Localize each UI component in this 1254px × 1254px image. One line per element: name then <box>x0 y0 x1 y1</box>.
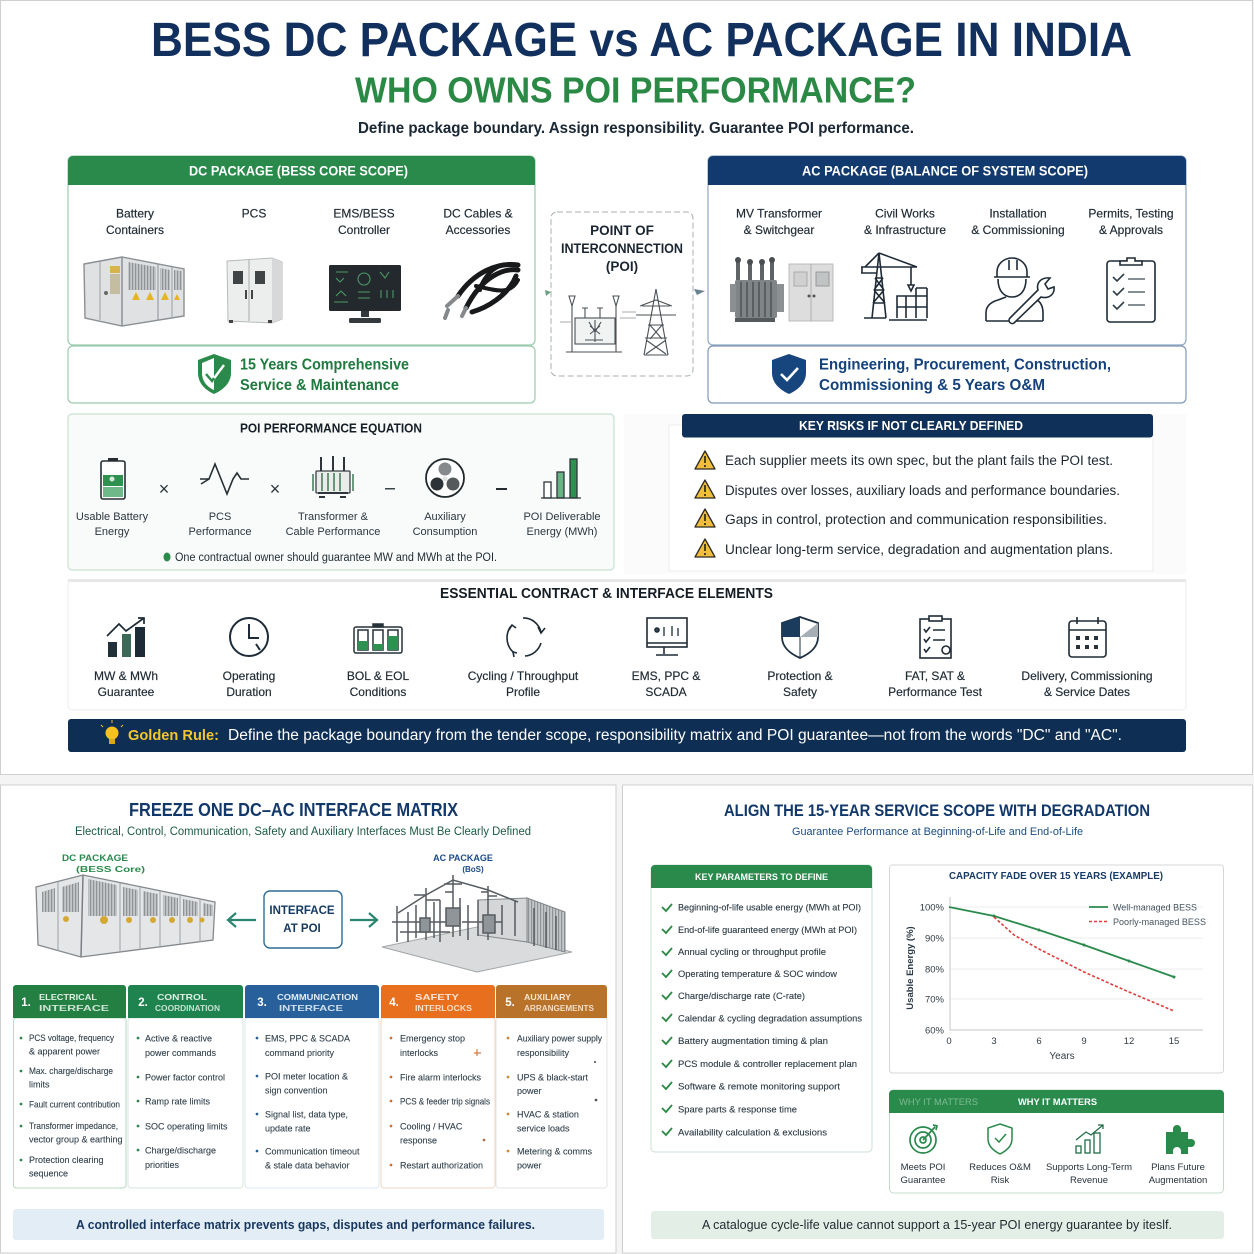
icon: PCS waveform <box>200 464 249 494</box>
labels: contract elements: Protection & <box>767 669 833 683</box>
labels: DC scope items: EMS/BESS <box>333 206 395 220</box>
heading: POI: (POI) <box>606 259 638 274</box>
heading: POI: INTERCONNECTION <box>561 241 683 256</box>
arrow: DC to POI <box>545 290 551 296</box>
labels: why it matters: Risk <box>991 1175 1009 1186</box>
checklist: parameters: Calendar & cycling degradation assumptions <box>678 1014 862 1024</box>
labels: equation terms: Usable Battery <box>76 511 149 523</box>
labels: contract elements: Guarantee <box>98 685 155 699</box>
matrix: interface columns <box>13 985 609 1188</box>
column 5: auxiliary: responsibility <box>517 1048 570 1058</box>
icon: risk shield <box>988 1124 1012 1154</box>
labels: AC scope items: Civil Works <box>875 206 935 220</box>
label: AC package: AC PACKAGE <box>433 853 493 863</box>
column 1: electrical: Protection clearing <box>29 1155 104 1165</box>
column 1: electrical: PCS voltage, frequency <box>29 1033 114 1043</box>
labels: contract elements: Duration <box>226 685 272 699</box>
column 2: control: priorities <box>145 1160 180 1170</box>
icon: safety shield <box>782 617 818 658</box>
labels: equation terms: Energy <box>95 526 130 538</box>
column 3: communication: Communication timeout <box>265 1146 360 1156</box>
column 5: auxiliary: Metering & comms <box>517 1146 593 1156</box>
panel: interface matrix <box>0 785 616 1253</box>
labels: AC scope items: & Approvals <box>1099 223 1163 237</box>
column 2: control: Power factor control <box>145 1072 225 1082</box>
tagline: Define package boundary. Assign responsibility. Guarantee POI performance. <box>358 120 914 137</box>
y axis labels: 90% <box>925 934 945 944</box>
icon: checklist clipboard <box>1107 258 1155 322</box>
panel: POI performance equation <box>68 414 614 570</box>
heading: interface matrix: FREEZE ONE DC–AC INTERFACE MATRIX <box>129 800 458 820</box>
labels: contract elements: Cycling / Throughput <box>468 669 579 683</box>
panel: main comparison <box>0 0 1252 774</box>
column 4: safety: SAFETY <box>415 992 459 1002</box>
illustration: AC substation <box>382 875 572 972</box>
subheading: interface matrix: Electrical, Control, Communication, Safety and Auxiliary Interfaces Must Be Clearly Defined <box>75 826 531 838</box>
column 3: communication: INTERFACE <box>279 1004 344 1013</box>
checklist: parameters: End-of-life guaranteed energy (MWh at POI) <box>678 925 857 936</box>
labels: DC scope items: Containers <box>106 223 164 237</box>
labels: equation terms <box>76 511 601 538</box>
icon: worker with wrench <box>986 258 1054 324</box>
risk 1: Each supplier meets its own spec, but the plant fails the POI test. <box>725 453 1113 468</box>
icon: deliverable bars <box>541 459 581 498</box>
column 1: electrical: & apparent power <box>29 1046 100 1056</box>
column 3: communication: COMMUNICATION <box>277 992 358 1002</box>
labels: AC scope items <box>736 206 1174 237</box>
risk 2: Disputes over losses, auxiliary loads and performance boundaries. <box>725 483 1120 498</box>
column 2: control: Ramp rate limits <box>145 1096 211 1106</box>
x axis labels: 6 <box>1036 1036 1042 1047</box>
arrow: to DC package <box>228 913 256 927</box>
legend <box>1089 902 1206 928</box>
column 2: control: Charge/discharge <box>145 1146 216 1156</box>
labels: equation terms: Transformer & <box>298 511 369 523</box>
icon: battery <box>101 458 125 499</box>
x axis title: Years <box>1049 1051 1075 1062</box>
callout text: AC service: Engineering, Procurement, Construction, <box>819 356 1111 374</box>
note: contractual owner: One contractual owner should guarantee MW and MWh at the POI. <box>175 552 497 564</box>
label: DC package: (BESS Core) <box>76 865 145 874</box>
arrow: to AC package <box>350 913 377 927</box>
column 2: control: Active & reactive <box>145 1034 212 1044</box>
icon: clock <box>230 618 268 656</box>
icon: transformer and tower <box>560 289 676 355</box>
subheading: service scope: Guarantee Performance at Beginning-of-Life and End-of-Life <box>792 826 1083 838</box>
heading: essential elements: ESSENTIAL CONTRACT & INTERFACE ELEMENTS <box>440 586 773 602</box>
legend: Well-managed BESS <box>1113 902 1197 914</box>
icon: transformer <box>313 456 353 497</box>
icon: battery container <box>84 257 184 326</box>
icon: auxiliary fan <box>426 459 464 497</box>
panel: why it matters <box>889 1090 1224 1193</box>
x axis labels: 0 <box>946 1036 952 1047</box>
heading: POI: POINT OF <box>590 223 654 238</box>
operator: multiply: × <box>159 479 169 499</box>
labels: contract elements: Performance Test <box>888 685 983 699</box>
y axis labels: 70% <box>925 994 945 1006</box>
banner: controlled interface matrix <box>13 1209 604 1240</box>
callout text: AC service <box>819 356 1111 394</box>
icon: revenue chart <box>1076 1125 1103 1153</box>
banner: golden rule: Golden Rule: <box>128 727 219 744</box>
column 5: auxiliary: Auxiliary power supply <box>517 1034 602 1044</box>
column 4: safety: Fire alarm interlocks <box>400 1072 482 1082</box>
labels: AC scope items: MV Transformer <box>736 206 822 220</box>
panel: AC service callout <box>708 346 1186 403</box>
labels: DC scope items: Battery <box>116 206 154 220</box>
column 1: electrical: Transformer impedance, <box>29 1121 118 1131</box>
label: DC package <box>62 853 145 874</box>
icon: MV transformer and switchgear <box>730 257 833 322</box>
x axis labels: 3 <box>991 1036 997 1047</box>
column 4: safety: PCS & feeder trip signals <box>400 1096 490 1106</box>
y axis labels <box>920 902 945 1036</box>
column 4: safety: 4. <box>389 997 399 1009</box>
checklist: parameters: Annual cycling or throughput profile <box>678 947 826 958</box>
callout text: DC service <box>240 356 409 394</box>
risk 3: Gaps in control, protection and communication responsibilities. <box>725 512 1107 527</box>
column 3: communication <box>245 985 379 1188</box>
icon: SCADA monitor <box>647 618 687 655</box>
labels: why it matters: Reduces O&M <box>969 1162 1031 1173</box>
banner: golden rule: Define the package boundary from the tender scope, responsibility matrix and POI guarantee—not from the words "DC" and "AC". <box>228 727 1122 744</box>
labels: contract elements: Profile <box>506 685 540 699</box>
labels: DC scope items: Accessories <box>446 223 510 237</box>
labels: contract elements <box>94 669 1153 699</box>
column 1: electrical: ELECTRICAL <box>39 992 97 1002</box>
labels: why it matters: Plans Future <box>1151 1162 1205 1173</box>
callout: interface at POI: INTERFACE <box>269 905 335 917</box>
column 4: safety: INTERLOCKS <box>415 1004 473 1013</box>
labels: equation terms: PCS <box>209 511 231 523</box>
column 1: electrical: vector group & earthing <box>29 1134 123 1144</box>
column 2: control: COORDINATION <box>155 1004 220 1013</box>
icon: green shield <box>198 354 231 394</box>
label: DC package: DC PACKAGE <box>62 853 128 863</box>
line: well-managed BESS <box>949 907 1176 978</box>
checklist: parameters <box>662 902 862 1138</box>
column 4: safety: interlocks <box>400 1048 439 1058</box>
column 5: auxiliary: ARRANGEMENTS <box>524 1004 595 1013</box>
labels: contract elements: Conditions <box>350 685 406 699</box>
labels: DC scope items: Controller <box>338 223 390 237</box>
y axis labels: 100% <box>920 902 945 914</box>
icon: light bulb <box>101 720 123 744</box>
labels: why it matters <box>901 1162 1207 1186</box>
checklist: parameters: Battery augmentation timing & plan <box>678 1036 828 1047</box>
panel: key parameters <box>651 865 872 1152</box>
icon: navy shield <box>772 354 806 394</box>
labels: contract elements: FAT, SAT & <box>905 669 965 683</box>
column 5: auxiliary: service loads <box>517 1124 570 1134</box>
labels: DC scope items: PCS <box>242 206 266 220</box>
panel: service scope <box>622 785 1252 1253</box>
banner: catalogue cycle-life: A catalogue cycle-life value cannot support a 15-year POI energy guarantee by iteslf. <box>702 1218 1172 1232</box>
checklist: parameters: Spare parts & response time <box>678 1104 797 1116</box>
column 2: control: SOC operating limits <box>145 1122 228 1132</box>
heading: AC package: AC PACKAGE (BALANCE OF SYSTEM SCOPE) <box>802 164 1088 178</box>
icon: PCS cabinet <box>227 258 282 323</box>
icon: MW guarantee chart <box>107 618 145 657</box>
callout text: DC service: 15 Years Comprehensive <box>240 356 409 374</box>
column 1: electrical: sequence <box>29 1168 68 1178</box>
checklist: parameters: Beginning-of-life usable energy (MWh at POI) <box>678 902 861 914</box>
column 1: electrical: limits <box>29 1080 50 1090</box>
panel: AC package <box>708 156 1186 403</box>
illustration: BESS container <box>36 875 215 957</box>
labels: equation terms: POI Deliverable <box>523 511 601 523</box>
operator: minus <box>385 488 395 490</box>
labels: equation terms: Cable Performance <box>286 526 380 538</box>
y axis labels: 80% <box>925 964 945 976</box>
icon: calendar <box>1069 617 1106 657</box>
labels: contract elements: SCADA <box>645 685 687 699</box>
labels: DC scope items: DC Cables & <box>443 206 513 220</box>
labels: why it matters: Augmentation <box>1149 1175 1207 1186</box>
panel: DC service callout <box>68 346 535 403</box>
column 3: communication: update rate <box>265 1124 311 1134</box>
icon: BOL EOL batteries <box>354 624 402 653</box>
column 3: communication: EMS, PPC & SCADA <box>265 1034 350 1044</box>
chart: capacity fade <box>890 865 1224 1073</box>
column 3: communication: & stale data behavior <box>265 1160 350 1170</box>
column 1: electrical: Fault current contribution <box>29 1100 120 1110</box>
icon: DC cables <box>445 264 518 318</box>
checklist: parameters: Charge/discharge rate (C-rate) <box>678 991 805 1002</box>
icon: puzzle piece <box>1166 1125 1195 1154</box>
panel: DC package <box>68 156 535 403</box>
icon: crane and civil works <box>861 253 927 320</box>
label: AC package <box>433 853 493 874</box>
labels: contract elements: MW & MWh <box>94 669 158 683</box>
operator: multiply: × <box>270 479 280 499</box>
column 3: communication: command priority <box>265 1048 335 1058</box>
column 5: auxiliary: UPS & black-start <box>517 1072 589 1082</box>
column 4: safety: Restart authorization <box>400 1160 483 1170</box>
labels: AC scope items: & Infrastructure <box>864 223 946 237</box>
operator: minus <box>496 488 507 490</box>
column 3: communication: POI meter location & <box>265 1072 348 1082</box>
x axis labels <box>946 1036 1179 1047</box>
panel: point of interconnection <box>545 212 705 376</box>
labels: why it matters: Meets POI <box>901 1162 945 1173</box>
heading: key risks: KEY RISKS IF NOT CLEARLY DEFINED <box>799 418 1023 433</box>
heading: key risks <box>682 414 1153 438</box>
x axis labels: 15 <box>1169 1036 1179 1047</box>
labels: contract elements: & Service Dates <box>1044 685 1130 699</box>
heading: equation: POI PERFORMANCE EQUATION <box>240 420 422 436</box>
labels: AC scope items: & Switchgear <box>744 223 814 237</box>
panel: essential contract elements <box>68 579 1186 710</box>
column 5: auxiliary <box>496 985 607 1188</box>
y axis title: Usable Energy (%) <box>905 926 916 1010</box>
panel: key risks <box>624 414 1186 574</box>
labels: why it matters: Revenue <box>1070 1175 1108 1186</box>
labels: contract elements: BOL & EOL <box>347 669 409 683</box>
icon: cycling arrows <box>507 618 545 657</box>
labels: why it matters: Guarantee <box>901 1175 945 1186</box>
icon: EMS monitor <box>329 265 401 323</box>
labels: equation terms: Auxiliary <box>424 511 466 523</box>
column 5: auxiliary: 5. <box>505 997 515 1009</box>
labels: contract elements: EMS, PPC & <box>632 669 700 683</box>
column 5: auxiliary: AUXILIARY <box>524 992 571 1002</box>
column 1: electrical: 1. <box>21 997 31 1009</box>
labels: AC scope items: & Commissioning <box>971 223 1065 237</box>
column 5: auxiliary: power <box>517 1160 542 1170</box>
labels: equation terms: Energy (MWh) <box>527 526 597 538</box>
risk 4: Unclear long-term service, degradation and augmentation plans. <box>725 542 1113 557</box>
labels: contract elements: Operating <box>223 669 275 683</box>
callout text: DC service: Service & Maintenance <box>240 377 399 394</box>
checklist: parameters: PCS module & controller replacement plan <box>678 1059 857 1070</box>
title: BESS DC PACKAGE vs AC PACKAGE IN INDIA <box>151 14 1132 67</box>
column 2: control: CONTROL <box>157 992 207 1002</box>
chart title: CAPACITY FADE OVER 15 YEARS (EXAMPLE) <box>949 870 1163 882</box>
column 3: communication: sign convention <box>265 1086 328 1096</box>
column 2: control <box>128 985 243 1188</box>
column 4: safety: response <box>400 1136 437 1146</box>
column 4: safety: Cooling / HVAC <box>400 1122 463 1132</box>
heading: why it matters: WHY IT MATTERS <box>899 1097 978 1108</box>
labels: contract elements: Safety <box>783 685 817 699</box>
checklist: parameters: Operating temperature & SOC window <box>678 969 837 980</box>
icon: test checklist <box>920 616 951 658</box>
callout: interface at POI <box>264 891 342 948</box>
column 1: electrical: INTERFACE <box>39 1004 110 1013</box>
icon: target <box>910 1125 937 1153</box>
checklist: parameters: Availability calculation & exclusions <box>678 1128 827 1138</box>
banner: catalogue cycle-life <box>651 1211 1224 1239</box>
labels: equation terms: Performance <box>189 526 251 538</box>
heading: DC package: DC PACKAGE (BESS CORE SCOPE) <box>189 164 408 178</box>
checklist: parameters: Software & remote monitoring support <box>678 1082 840 1092</box>
label: AC package: (BoS) <box>462 865 484 874</box>
panel: why it matters: WHY IT MATTERS <box>1018 1097 1097 1108</box>
column 3: communication: Signal list, data type, <box>265 1110 348 1120</box>
labels: DC scope items <box>106 206 513 237</box>
column 4: safety: Emergency stop <box>400 1034 465 1044</box>
column 1: electrical: Max. charge/discharge <box>29 1066 113 1076</box>
column 5: auxiliary: HVAC & station <box>517 1110 579 1120</box>
x axis labels: 9 <box>1081 1036 1087 1047</box>
labels: why it matters: Supports Long-Term <box>1046 1162 1132 1173</box>
line: poorly-managed BESS <box>994 917 1174 1011</box>
banner: golden rule <box>68 719 1186 752</box>
y axis labels: 60% <box>925 1026 945 1036</box>
arrow: POI to AC <box>694 289 705 295</box>
column 2: control: power commands <box>145 1048 217 1058</box>
legend: Poorly-managed BESS <box>1113 917 1206 928</box>
column 5: auxiliary: power <box>517 1086 542 1096</box>
x axis labels: 12 <box>1124 1036 1134 1047</box>
heading: service scope: ALIGN THE 15-YEAR SERVICE SCOPE WITH DEGRADATION <box>724 801 1150 820</box>
heading: POI <box>561 223 683 274</box>
labels: equation terms: Consumption <box>413 526 477 538</box>
labels: AC scope items: Installation <box>989 206 1047 220</box>
column 1: electrical <box>13 985 126 1188</box>
column 4: safety <box>381 985 495 1188</box>
heading: key parameters: KEY PARAMETERS TO DEFINE <box>695 872 828 883</box>
labels: AC scope items: Permits, Testing <box>1088 206 1174 220</box>
subtitle: WHO OWNS POI PERFORMANCE? <box>355 70 916 110</box>
labels: contract elements: Delivery, Commissioning <box>1021 669 1153 683</box>
callout text: AC service: Commissioning & 5 Years O&M <box>819 377 1045 394</box>
callout: interface at POI: AT POI <box>283 923 321 935</box>
banner: controlled interface matrix: A controlled interface matrix prevents gaps, disputes and performance failures. <box>76 1218 535 1232</box>
column 3: communication: 3. <box>257 997 267 1009</box>
column 2: control: 2. <box>138 997 148 1009</box>
